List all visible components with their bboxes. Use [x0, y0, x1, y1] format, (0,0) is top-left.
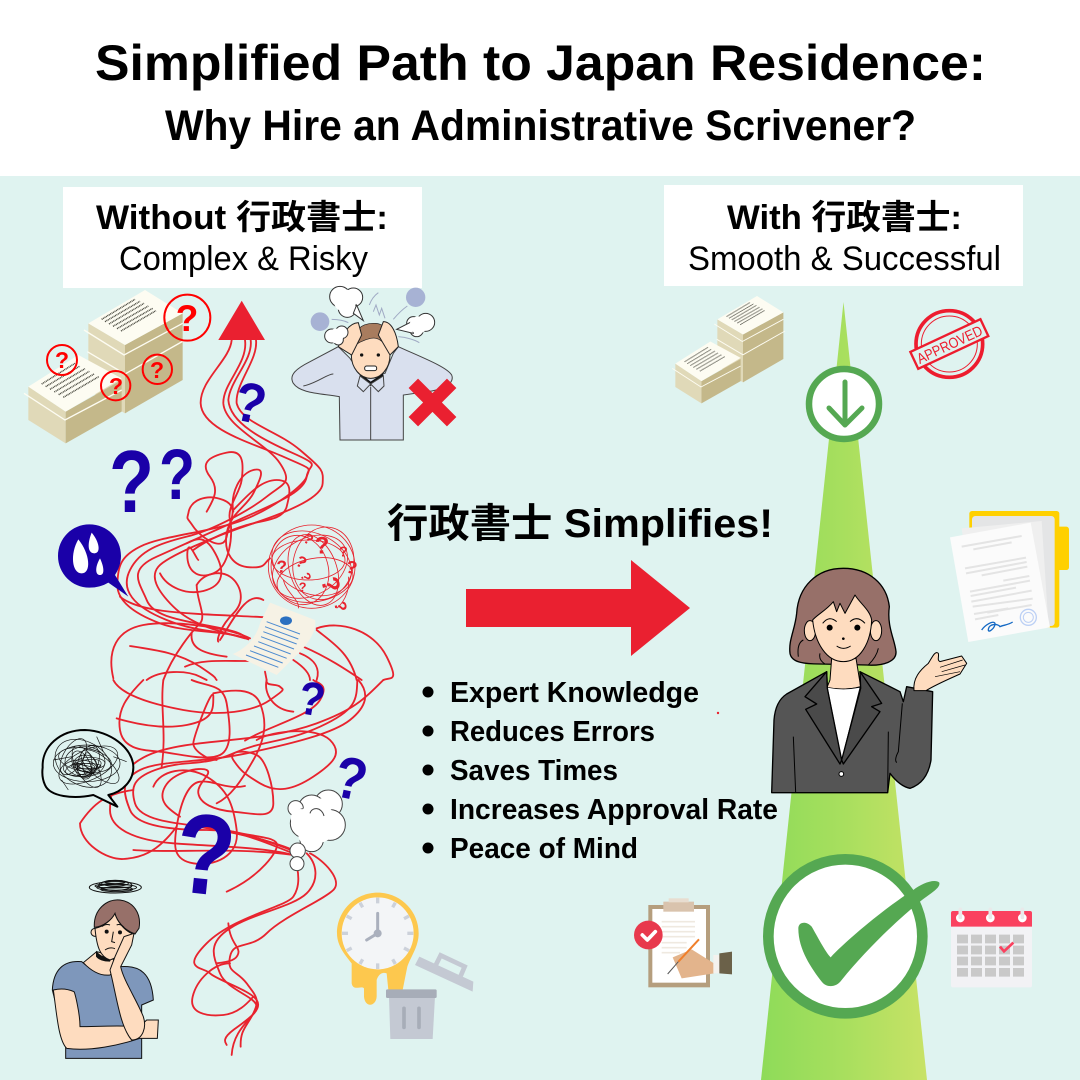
icon: paper stacks, tidy	[672, 296, 785, 403]
panel heading: without scrivener: Without 行政書士:	[96, 199, 388, 237]
benefits list: Saves Times	[450, 755, 618, 787]
icon: calendar	[951, 909, 1032, 987]
blouse	[827, 687, 860, 760]
green tapering path	[761, 302, 927, 1080]
icon: approved stamp: APPROVED	[915, 323, 985, 368]
icon: paper stacks with question marks	[24, 290, 210, 443]
icon: confused man with hand on cheek	[52, 880, 158, 1058]
red tangled path: lower	[80, 680, 383, 1055]
panel heading: with scrivener	[664, 185, 1023, 286]
character: woman in business suit	[772, 568, 967, 793]
icon: paper stacks with question marks: ?	[55, 347, 69, 373]
benefits list: Expert Knowledge	[450, 677, 699, 709]
red tangled ball with question marks: ?	[330, 600, 351, 613]
red tangled ball with question marks: ?	[344, 556, 359, 579]
benefits list: Peace of Mind	[450, 833, 638, 865]
blue question mark: near arrow: ?	[229, 369, 272, 437]
stray red dot	[717, 712, 719, 714]
red tangled ball with question marks: ?	[299, 581, 307, 595]
blue sweat bubble	[58, 524, 128, 597]
red tangled ball with question marks: ?	[297, 570, 314, 583]
red tangled ball with question marks: ?	[292, 553, 309, 573]
red tangled path: upper	[111, 340, 393, 680]
red tangled ball with question marks: ?	[339, 545, 348, 561]
icon: paper stacks with question marks: ?	[176, 298, 198, 339]
red tangled ball with question marks: ?	[300, 531, 316, 549]
icon: big check mark circle	[768, 859, 939, 1013]
lapels	[805, 672, 882, 764]
icon: folder with signed document	[950, 511, 1069, 642]
central heading: 行政書士 Simplifies!	[387, 502, 773, 546]
icon: approved stamp	[910, 311, 988, 377]
blue question mark: large: ?	[169, 789, 241, 922]
icon: paper stacks with question marks: ?	[150, 357, 164, 383]
icon: melting clock	[337, 893, 419, 1005]
panel heading: without scrivener: Complex & Risky	[119, 240, 368, 278]
subtitle: Why Hire an Administrative Scrivener?	[165, 102, 916, 150]
benefits list	[422, 677, 778, 865]
white cloud with blue question mark: ?	[328, 743, 373, 814]
blue question mark: small middle: ?	[295, 670, 329, 727]
icon: trash can	[386, 955, 473, 1039]
blue question marks: double: ?	[109, 432, 154, 531]
panel heading: without scrivener	[63, 187, 422, 288]
red tangled ball with question marks: ?	[276, 557, 287, 577]
red tangled ball with question marks	[261, 519, 362, 613]
icon: paper stacks with question marks: ?	[109, 373, 123, 399]
neck	[827, 658, 861, 690]
central red arrow	[466, 560, 690, 656]
white cloud with blue question mark	[288, 743, 373, 871]
blue question marks: double: ?	[159, 436, 195, 515]
title: Simplified Path to Japan Residence:	[95, 35, 986, 91]
icon: crumpled document	[233, 603, 315, 675]
icon: down arrow circle	[809, 369, 879, 439]
black scribble thought bubble	[42, 730, 133, 807]
panel heading: with scrivener: With 行政書士:	[727, 199, 962, 237]
icon: clipboard with signing hand	[634, 898, 732, 987]
red arrow tip on tangled path	[218, 301, 265, 340]
red tangled ball with question marks: ?	[315, 532, 329, 559]
jacket	[772, 672, 933, 793]
panel heading: with scrivener: Smooth & Successful	[688, 240, 1001, 278]
hair	[790, 568, 896, 665]
face	[804, 621, 816, 641]
icon: stressed man	[292, 286, 452, 440]
benefits list: Increases Approval Rate	[450, 794, 778, 826]
hand	[914, 653, 967, 691]
blue question marks: double	[109, 432, 195, 531]
benefits list: Reduces Errors	[450, 716, 655, 748]
red tangled ball with question marks: ?	[315, 574, 345, 595]
